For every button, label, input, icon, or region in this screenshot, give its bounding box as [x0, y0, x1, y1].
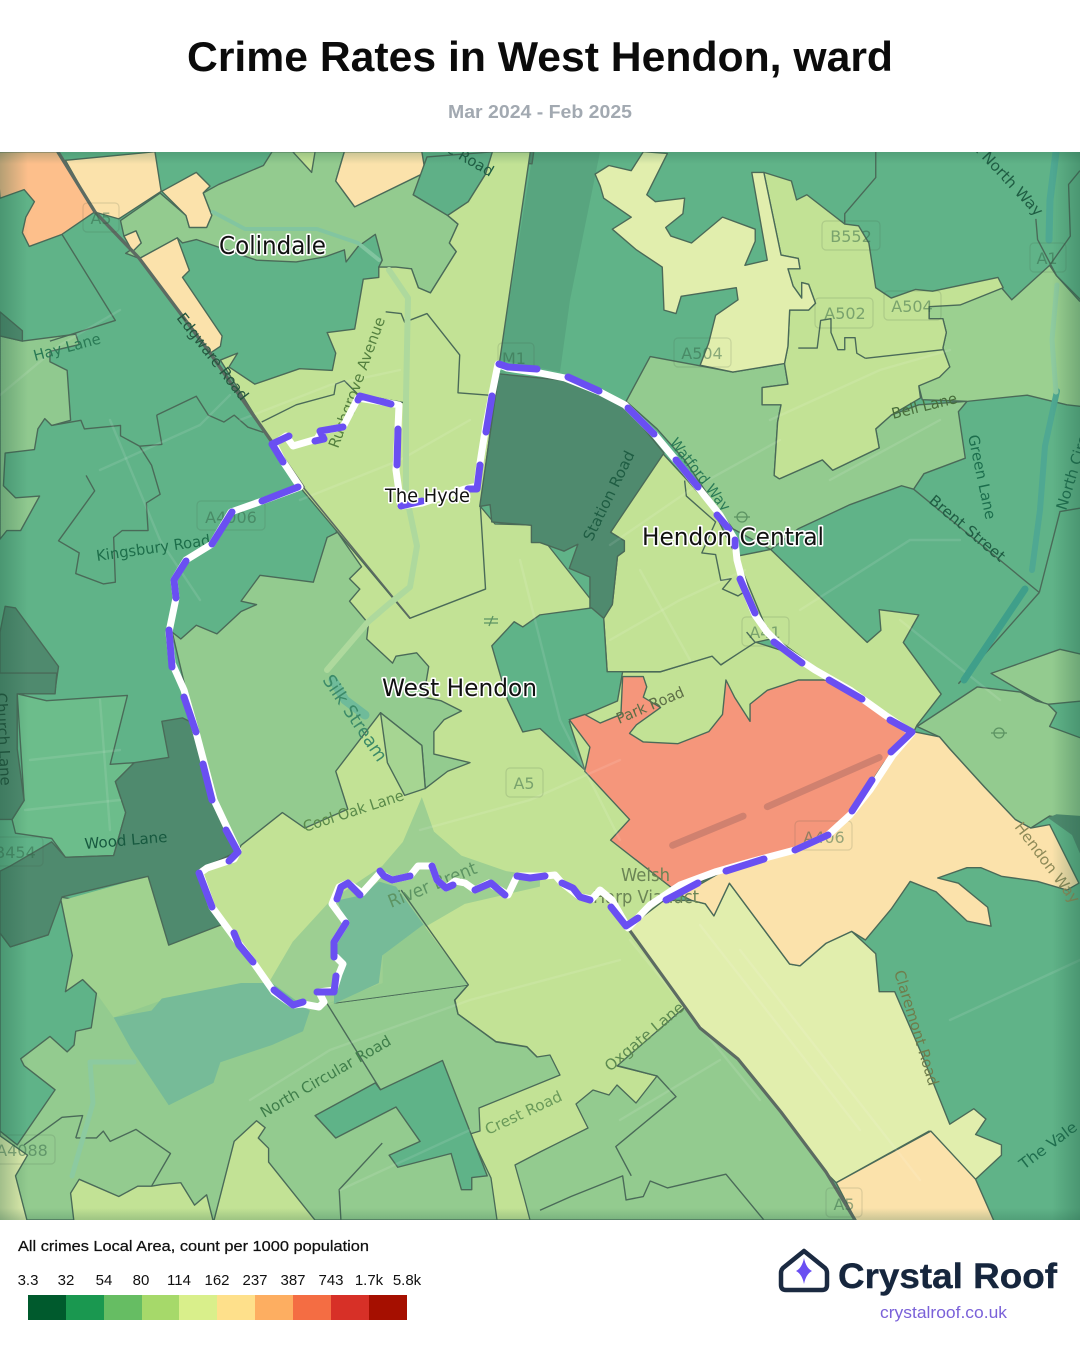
west hendon and south-west areas — [0, 532, 540, 1222]
legend colour swatches — [28, 1295, 407, 1320]
south-east areas — [540, 677, 1080, 1222]
shield A5 central — [506, 768, 543, 797]
shield A504 west: A504 — [681, 344, 723, 363]
dark patches west — [0, 312, 22, 341]
legend title: All crimes Local Area, count per 1000 population — [18, 1238, 369, 1255]
shield A504 east — [884, 291, 941, 320]
label Aerodrome Road: Aerodrome Road — [380, 102, 497, 180]
Hay Lane light area — [0, 334, 79, 539]
legend scale values: 5.8k — [393, 1272, 422, 1289]
shield A502 — [815, 298, 873, 328]
shield A406: A406 — [803, 828, 845, 847]
label Claremont Road: Claremont Road — [890, 968, 942, 1088]
central lime area — [204, 506, 824, 1220]
shield A504 west — [674, 338, 731, 367]
legend scale values: 32 — [58, 1272, 74, 1289]
mid outlined block south — [540, 1174, 764, 1220]
darkest green Wood Lane area — [0, 718, 238, 947]
label River Brent: River Brent — [385, 858, 480, 913]
west Hendon mid green — [172, 532, 470, 851]
label Bell Lane: Bell Lane — [890, 389, 959, 423]
shield A406 — [795, 821, 852, 850]
street names — [0, 102, 1080, 1174]
legend scale values: 80 — [133, 1272, 149, 1289]
label Great North Way: Great North Way — [945, 112, 1047, 220]
shield A5 south: A5 — [833, 1195, 855, 1214]
base area: medium green — [0, 152, 1080, 1220]
shield A504 east: A504 — [891, 297, 933, 316]
lime blocks south — [71, 1179, 213, 1222]
label North Circular Road: North Circular Road — [257, 1032, 394, 1121]
mid green north of Hendon Central — [626, 357, 967, 549]
legend scale values: 54 — [96, 1272, 112, 1289]
label Welsh Harp Viaduct: Harp Viaduct — [593, 888, 699, 908]
tube symbol east — [991, 728, 1007, 738]
paler green meadow — [62, 876, 269, 1017]
label Green Lane: Green Lane — [964, 433, 1000, 521]
label Crest Road: Crest Road — [482, 1087, 565, 1139]
shield M1 — [498, 343, 534, 372]
shield B454 — [0, 837, 43, 866]
label Cool Oak Lane: Cool Oak Lane — [301, 786, 406, 836]
river band mid green — [269, 797, 540, 1011]
top-centre light green area — [121, 152, 458, 293]
label The Vale: The Vale — [1015, 1118, 1080, 1174]
label Silk Stream: Silk Stream — [318, 671, 391, 766]
pale district north — [595, 152, 815, 372]
label Oxgate Lane: Oxgate Lane — [601, 998, 688, 1075]
subtitle: date range: Mar 2024 - Feb 2025 — [448, 101, 632, 122]
place name: Hendon Central: Hendon Central — [642, 523, 824, 551]
shield A4006 — [197, 501, 265, 530]
label Welsh Harp Viaduct — [593, 866, 699, 908]
shield A41: A41 — [749, 623, 781, 642]
mid green wedge beside the lake — [327, 924, 468, 1004]
shield A5 north — [83, 203, 119, 232]
legend scale values: 387 — [280, 1272, 306, 1289]
label Station Road: Station Road — [579, 448, 639, 544]
icon: house with star — [781, 1251, 827, 1290]
west and north-west areas — [0, 152, 534, 690]
label Park Road: Park Road — [614, 683, 687, 728]
medium patch Park Road — [492, 608, 623, 770]
medium green block south — [315, 1061, 487, 1190]
label Welsh Harp Viaduct: Welsh — [621, 866, 670, 886]
lime strip along Hendon Way — [736, 549, 941, 732]
place name: The Hyde: The Hyde — [384, 485, 470, 507]
darker strip beside the M1 — [500, 152, 600, 372]
label Rushgrove Avenue: Rushgrove Avenue — [325, 315, 389, 450]
website address: crystalroof.co.uk — [880, 1304, 1008, 1322]
A5 trunk road boundary — [58, 152, 855, 1220]
Hendon Central lime area — [604, 453, 771, 672]
label Brent Street: Brent Street — [925, 491, 1009, 566]
cream areas — [65, 152, 161, 219]
legend scale values: 237 — [242, 1272, 268, 1289]
lighter green strip — [12, 694, 134, 857]
label Wood Lane: Wood Lane — [84, 828, 168, 853]
legend scale values: 743 — [318, 1272, 344, 1289]
shield A5 south — [826, 1188, 862, 1217]
cream east area — [681, 732, 1079, 966]
rivers and streams — [72, 152, 1057, 1176]
label Hay Lane: Hay Lane — [31, 330, 103, 365]
orange area — [0, 152, 95, 246]
station symbols — [484, 512, 1007, 738]
green patch — [413, 152, 494, 215]
shield B552: B552 — [830, 227, 872, 246]
shield A1 — [1030, 243, 1066, 272]
map edge vignette — [0, 152, 1080, 1220]
ward boundary: purple dashes — [169, 364, 912, 1005]
legend scale values: 162 — [204, 1272, 230, 1289]
dark patch east — [1048, 814, 1080, 859]
north-east and Hendon Central areas — [480, 152, 1080, 770]
darkest green Hendon area — [480, 374, 664, 618]
legend scale values — [18, 1272, 422, 1289]
pale corner south-west — [0, 1135, 28, 1222]
areas drawn in page coordinates — [0, 152, 912, 1220]
Welsh Harp north arm — [334, 881, 424, 1004]
lime district north — [762, 172, 1003, 479]
logo: Crystal Roof — [781, 1251, 1057, 1322]
legend scale values: 114 — [167, 1272, 191, 1289]
cream south area — [836, 1131, 995, 1222]
dark patch top — [529, 152, 534, 164]
shield A502: A502 — [824, 304, 866, 323]
inner ward outlines — [262, 381, 406, 422]
road shields — [0, 203, 1066, 1217]
legend scale values: 3.3 — [18, 1272, 38, 1289]
dark column Church Lane — [0, 673, 57, 819]
ward boundary: white line — [169, 364, 912, 1007]
shield A5 north: A5 — [90, 209, 112, 228]
label Edgware Road: Edgware Road — [173, 309, 252, 404]
shield A1: A1 — [1036, 249, 1058, 268]
rail symbol Hendon — [484, 616, 498, 626]
place name: Colindale: Colindale — [219, 231, 326, 260]
shield A5 central: A5 — [513, 774, 535, 793]
inner ward outlines — [865, 350, 943, 358]
logo wordmark: Crystal Roof — [838, 1257, 1057, 1296]
roads — [0, 310, 1080, 1190]
salmon highest crime area — [569, 677, 914, 895]
mid green east of the junction — [917, 687, 1080, 828]
Welsh Harp reservoir — [114, 983, 310, 1105]
south-west light green area — [0, 897, 855, 1220]
shield A4088 — [0, 1135, 55, 1164]
railway mark on salmon area — [673, 816, 743, 845]
the Hyde lime area — [220, 152, 530, 618]
shield A41 — [742, 617, 789, 646]
place name: West Hendon: West Hendon — [382, 674, 537, 702]
pale south railway land — [628, 883, 1001, 1183]
medium green south-west — [0, 897, 96, 1145]
small light patch below Silk Stream — [381, 713, 425, 795]
shield M1: M1 — [502, 349, 526, 368]
tube symbol Hendon Central — [734, 512, 750, 522]
label Kingsbury Road: Kingsbury Road — [95, 531, 211, 565]
lime triangle — [293, 152, 315, 172]
shield A4006: A4006 — [205, 508, 257, 527]
right mid green area — [919, 265, 1080, 407]
shield B552 — [822, 221, 880, 250]
mid outline areas — [24, 1116, 83, 1145]
legend — [18, 1238, 422, 1320]
title: Crime Rates in West Hendon, ward — [187, 33, 893, 80]
label Watford Way: Watford Way — [666, 434, 734, 515]
legend scale values: 1.7k — [355, 1272, 384, 1289]
north-east mid green area — [991, 649, 1080, 704]
